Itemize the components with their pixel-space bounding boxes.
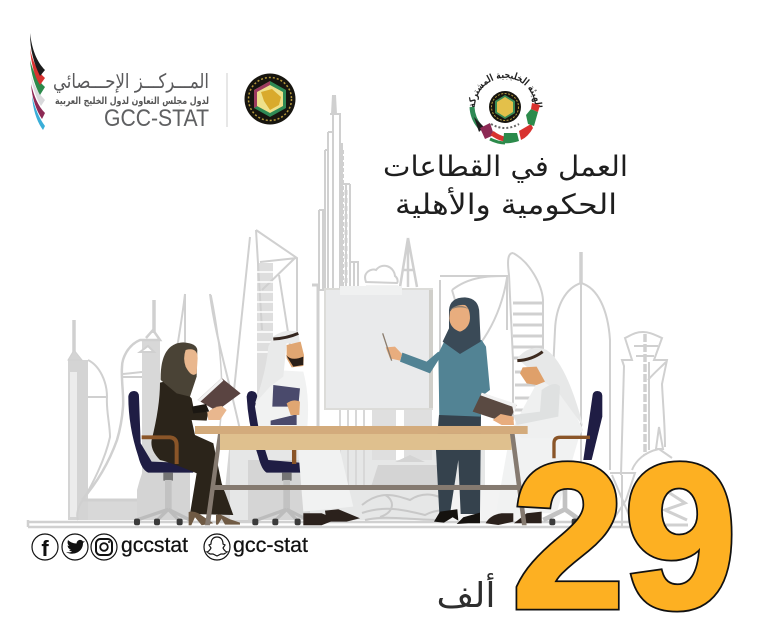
title <box>383 150 628 221</box>
unit label: thousand: ألف <box>436 573 496 616</box>
far-left towers <box>68 300 190 520</box>
icon: GCC emblem seal <box>244 74 296 124</box>
right towers <box>440 252 688 527</box>
second woman <box>383 297 517 524</box>
table <box>195 426 527 490</box>
floor line <box>28 520 640 527</box>
skyline illustration <box>28 95 688 527</box>
tall angular tower <box>233 230 297 428</box>
handle: gccstat: gccstat <box>121 534 188 557</box>
table top overlap and right leg <box>370 426 528 525</box>
presentation board <box>325 286 433 409</box>
people right (zoom coordinates) <box>370 297 602 525</box>
icon: joint statistical seal with flags: الهيئة الخليجية المشتركة <box>468 72 543 108</box>
icon: snapchat <box>204 534 230 560</box>
title: الحكومية والأهلية <box>395 186 617 221</box>
chair: first woman <box>128 391 193 525</box>
sail towers <box>175 294 256 520</box>
logo GCC-STAT wordmark: GCC-STAT <box>104 105 209 132</box>
icon: flag ribbon <box>30 33 45 130</box>
low buildings behind the table <box>230 410 520 520</box>
central tower <box>312 95 358 500</box>
icon: joint statistical seal with flags <box>468 72 543 144</box>
people left (zoom coordinates) <box>128 331 360 525</box>
icon: instagram <box>91 534 117 560</box>
first woman <box>142 342 241 525</box>
table leg: left <box>205 434 222 525</box>
icon: facebook: f <box>41 536 49 561</box>
cloud and cone <box>365 238 417 287</box>
logo: GCC-STAT ribbon and wordmark <box>30 33 209 132</box>
logo Arabic name: المـــركـــز الإحـــصائي <box>53 69 209 94</box>
logo Arabic subtitle: لدول مجلس التعاون لدول الخليج العربية <box>55 96 209 107</box>
chair: first man <box>247 391 307 525</box>
title: العمل في القطاعات <box>383 150 628 183</box>
icon: facebook <box>32 534 58 561</box>
social media handles <box>32 534 308 561</box>
icon: twitter <box>62 534 88 560</box>
chair: second man <box>543 391 602 525</box>
handle: gcc-stat: gcc-stat <box>233 534 308 557</box>
first man <box>255 331 360 525</box>
second man <box>486 348 583 525</box>
